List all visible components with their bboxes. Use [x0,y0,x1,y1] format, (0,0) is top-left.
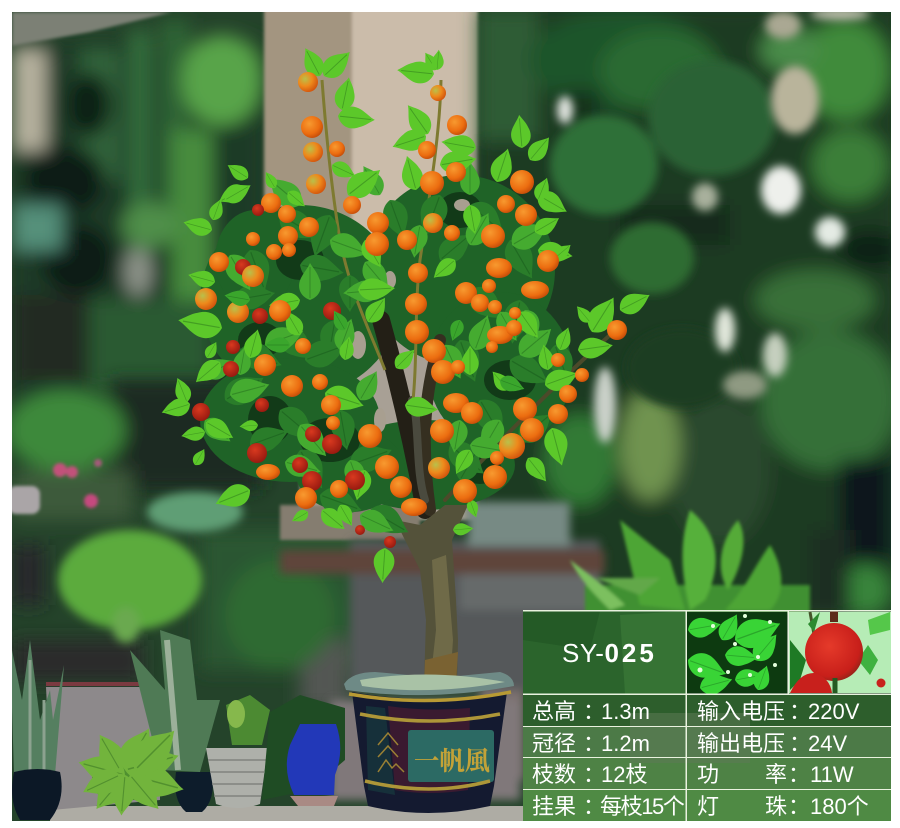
pillar [264,8,478,540]
spec: height: 总高 [532,699,576,724]
pot body [352,692,507,813]
spec: lamp beads: 180个 [810,794,869,819]
spec: height: 1.3m [601,699,650,724]
spec: fruit per branch: 挂果 [532,794,576,819]
spec: output voltage: 输出电压 [697,731,785,756]
bright sky gaps [557,8,870,443]
model number: SY-025 [562,638,657,668]
icon: bright leafy plant [78,728,184,816]
spec: power: 率 [765,762,787,787]
spec: input voltage: 220V [808,699,860,724]
background plant lower right [570,510,810,613]
spec: output voltage: 24V [808,731,847,756]
bright leaves [159,44,654,584]
panel: model header [523,611,686,694]
spec panel [523,610,891,821]
icon: leafy stems behind white vase [226,695,270,745]
trunk and branches [381,320,610,510]
spec: fruit per branch: 每枝15个 [600,794,685,819]
panel lines [523,610,891,821]
pot decorative panel [408,730,494,782]
spec: power: 功 [697,762,719,787]
pot chevrons [378,733,404,772]
ground [50,806,530,822]
spec: height: ： [583,699,605,724]
image: LED green foliage [684,610,787,697]
spec: lamp beads: 珠 [765,794,787,819]
icon: left snake plant [10,640,64,775]
blurred garden right [478,8,900,618]
beige gaps between leaves [350,199,470,432]
brick wall [280,502,605,800]
icon: middle snake plant [130,630,220,772]
spec: branches: ： [583,762,605,787]
spec: lamp beads: ： [788,794,810,819]
top-left grey band [12,12,172,46]
icon: dark vase [175,772,213,812]
icon: granite planter [46,687,160,810]
shaded leaves [218,191,580,544]
foliage mass [200,175,572,512]
spec: input voltage: ： [789,699,811,724]
blurred garden lower left [5,380,380,710]
icon: blue vase [287,724,340,795]
spec: power: ： [788,762,810,787]
leaves over fruits [223,288,527,396]
image: red fruit close-up [789,610,891,693]
spec: power: 11W [810,762,854,787]
round topiary bushes [550,60,776,408]
pot gold bands [349,692,511,701]
blurred garden left [12,15,265,392]
spec: fruit per branch: ： [583,794,605,819]
icon: ivy [262,695,345,800]
fruits [192,72,627,548]
spec: lamp beads: 灯 [697,794,719,819]
mid-tone leaves [199,161,559,541]
spec rows background [523,695,891,821]
icon: black vase [12,769,62,820]
spec: output voltage: ： [789,731,811,756]
pebbles [344,672,514,695]
spec: crown diameter: 冠径 [532,731,576,756]
spec: input voltage: 输入电压 [697,699,785,724]
pot [344,672,514,813]
spec: crown diameter: ： [583,731,605,756]
icon: white striped vase [206,748,268,808]
stone and flowers [8,459,102,514]
spec: branches: 12枝 [601,762,647,787]
tree [159,44,654,686]
spec: crown diameter: 1.2m [601,731,650,756]
pot inscription: 一帆風 [414,747,490,776]
spec: branches: 枝数 [532,762,576,787]
potted plants lower left [10,630,345,820]
